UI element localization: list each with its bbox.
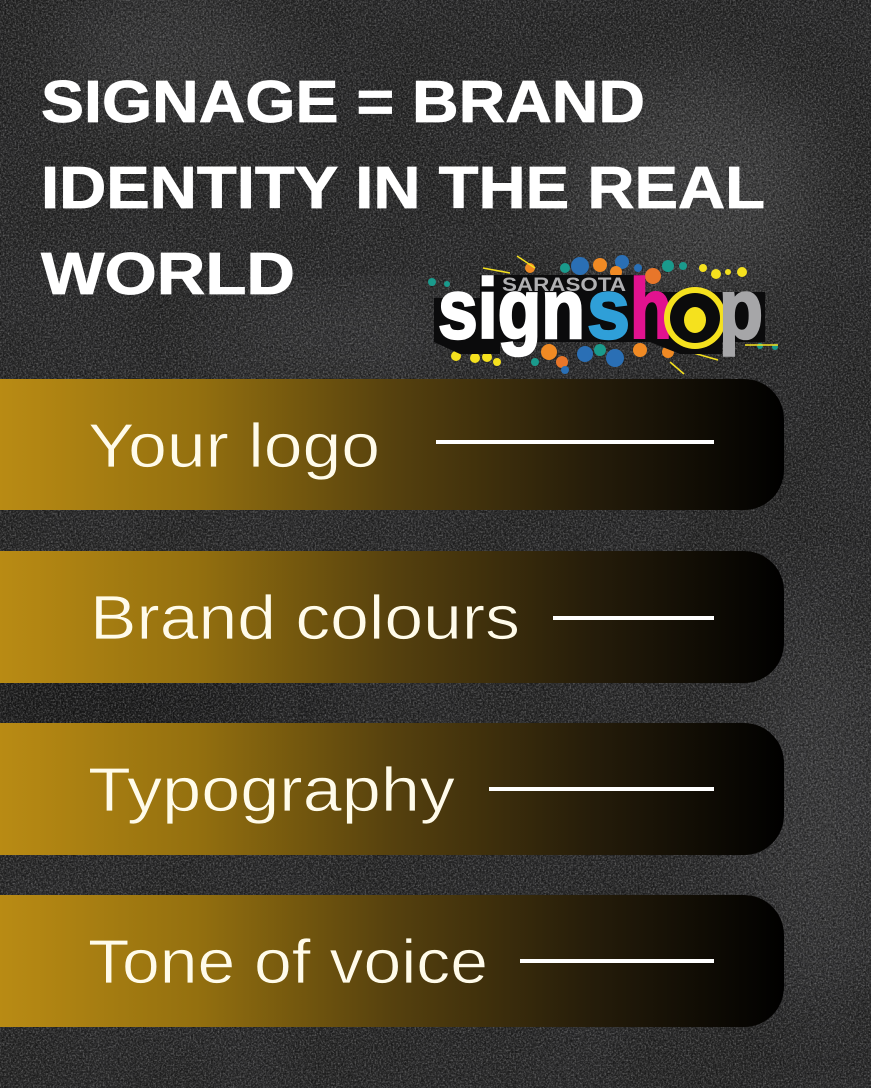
panel: typography [0, 723, 784, 855]
logo wordmark: sign [438, 262, 585, 356]
panel: your logo [0, 379, 784, 510]
panel: brand colours: Brand colours [90, 584, 520, 653]
panel: tone of voice [0, 895, 784, 1027]
logo yellow splat and o [664, 287, 726, 349]
logo dark plate [434, 275, 765, 354]
panel: tone of voice: Tone of voice [88, 928, 488, 997]
logo: SARASOTA: SARASOTA [502, 275, 626, 296]
panel: brand colours [0, 551, 784, 683]
logo: Sarasota Sign Shop [428, 255, 778, 374]
title: SIGNAGE = BRAND [41, 69, 645, 135]
panel: typography: Typography [88, 756, 455, 825]
logo wordmark: s [587, 262, 630, 356]
logo letter p: p [719, 262, 763, 356]
title [41, 69, 765, 307]
logo paint splatter [428, 255, 778, 374]
title: WORLD [41, 241, 295, 307]
panel: your logo: Your logo [88, 412, 380, 481]
logo wordmark: h [630, 262, 672, 356]
title: IDENTITY IN THE REAL [41, 155, 765, 221]
